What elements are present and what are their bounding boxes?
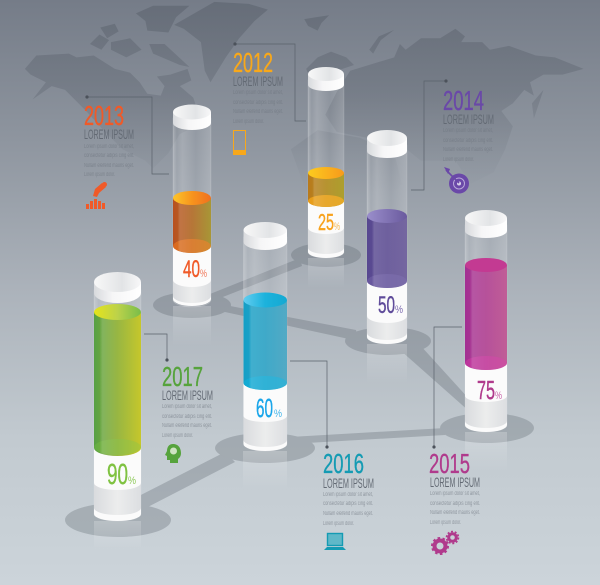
world map	[25, 2, 584, 214]
text block: 2015: consectetur adipis cing elit.	[430, 501, 480, 507]
text block: 2013: Nullam eleifend mauris eget.	[84, 163, 134, 169]
text block: 2015	[429, 448, 480, 526]
floor reflections	[94, 258, 507, 551]
text block: 2015: Lorem ipsum dolor.	[430, 520, 461, 526]
value: 90%: 90	[107, 459, 128, 491]
text block: 2014: Lorem ipsum dolor.	[443, 157, 474, 163]
text block: 2017: Lorem ipsum dolor.	[162, 433, 193, 439]
text block: 2017	[162, 361, 213, 439]
text block: 2012: consectetur adipis cing elit.	[233, 100, 283, 106]
text block: 2013	[84, 100, 134, 178]
text block: 2015: Nullam eleifend mauris eget.	[430, 510, 480, 516]
text block: 2014: Nullam eleifend mauris eget.	[443, 147, 493, 153]
icon: target	[444, 167, 469, 194]
text block: 2012	[233, 47, 283, 125]
text block: 2012: Lorem ipsum dolor sit amet,	[233, 90, 283, 96]
text block: 2016: Lorem ipsum dolor.	[323, 521, 354, 527]
value: 25%: 25	[318, 209, 334, 235]
text block: 2015: 2015	[429, 448, 470, 479]
cylinder: 2012 25%	[308, 67, 344, 258]
icon: laptop	[324, 534, 346, 550]
value: 40%: 40	[183, 256, 200, 283]
cylinder: 2015 75%	[465, 210, 507, 432]
value: 90%: %	[128, 475, 136, 487]
leader lines	[85, 42, 462, 449]
text block: 2014: consectetur adipis cing elit.	[443, 138, 493, 144]
text block: 2012: Lorem ipsum dolor.	[233, 119, 264, 125]
text block: 2013: 2013	[84, 100, 124, 131]
icon: head with light bulb	[165, 444, 181, 463]
cylinder: 2016 60%	[244, 222, 287, 451]
text block: 2015: Lorem ipsum dolor sit amet,	[430, 491, 480, 497]
value: 50%: %	[395, 304, 403, 316]
text block: 2014: LOREM IPSUM	[443, 111, 494, 127]
text block: 2012: Nullam eleifend mauris eget.	[233, 109, 283, 115]
cylinder: 2014 50%	[367, 130, 407, 344]
value: 60%: %	[274, 408, 282, 420]
text block: 2016	[323, 448, 374, 527]
text block: 2017: 2017	[162, 361, 203, 392]
icon: gears	[432, 532, 458, 554]
connector network and floor shadows	[65, 243, 534, 551]
text block: 2014: 2014	[443, 85, 484, 116]
text block: 2014: Lorem ipsum dolor sit amet,	[443, 128, 493, 134]
text block: 2012: 2012	[233, 47, 273, 78]
value: 40%: %	[200, 268, 207, 280]
cylinder: 2017 90%	[94, 272, 141, 521]
text block: 2017: LOREM IPSUM	[162, 387, 213, 403]
cylinder: 2013 40%	[173, 104, 211, 307]
value: 60%: 60	[256, 393, 273, 423]
text block: 2013: Lorem ipsum dolor sit amet,	[84, 144, 134, 150]
text block: 2016: Lorem ipsum dolor sit amet,	[323, 492, 373, 498]
text block: 2017: Nullam eleifend mauris eget.	[162, 423, 212, 429]
icon: smartphone	[233, 130, 246, 155]
text block: 2016: LOREM IPSUM	[323, 475, 374, 491]
value: 75%: %	[495, 390, 502, 402]
text block: 2012: LOREM IPSUM	[233, 73, 283, 89]
text block: 2013: consectetur adipis cing elit.	[84, 153, 134, 159]
icon: microscope chart	[86, 182, 107, 209]
text block: 2016: 2016	[323, 448, 364, 479]
text block: 2014	[443, 85, 494, 163]
text block: 2013: Lorem ipsum dolor.	[84, 172, 115, 178]
text block: 2017: consectetur adipis cing elit.	[162, 414, 212, 420]
text block: 2016: consectetur adipis cing elit.	[323, 501, 373, 507]
text block: 2015: LOREM IPSUM	[430, 474, 480, 490]
text block: 2017: Lorem ipsum dolor sit amet,	[162, 404, 212, 410]
text block: 2016: Nullam eleifend mauris eget.	[323, 511, 373, 517]
value: 50%: 50	[378, 292, 395, 319]
value: 25%: %	[334, 221, 340, 233]
text block: 2013: LOREM IPSUM	[84, 126, 134, 142]
value: 75%: 75	[477, 375, 495, 405]
